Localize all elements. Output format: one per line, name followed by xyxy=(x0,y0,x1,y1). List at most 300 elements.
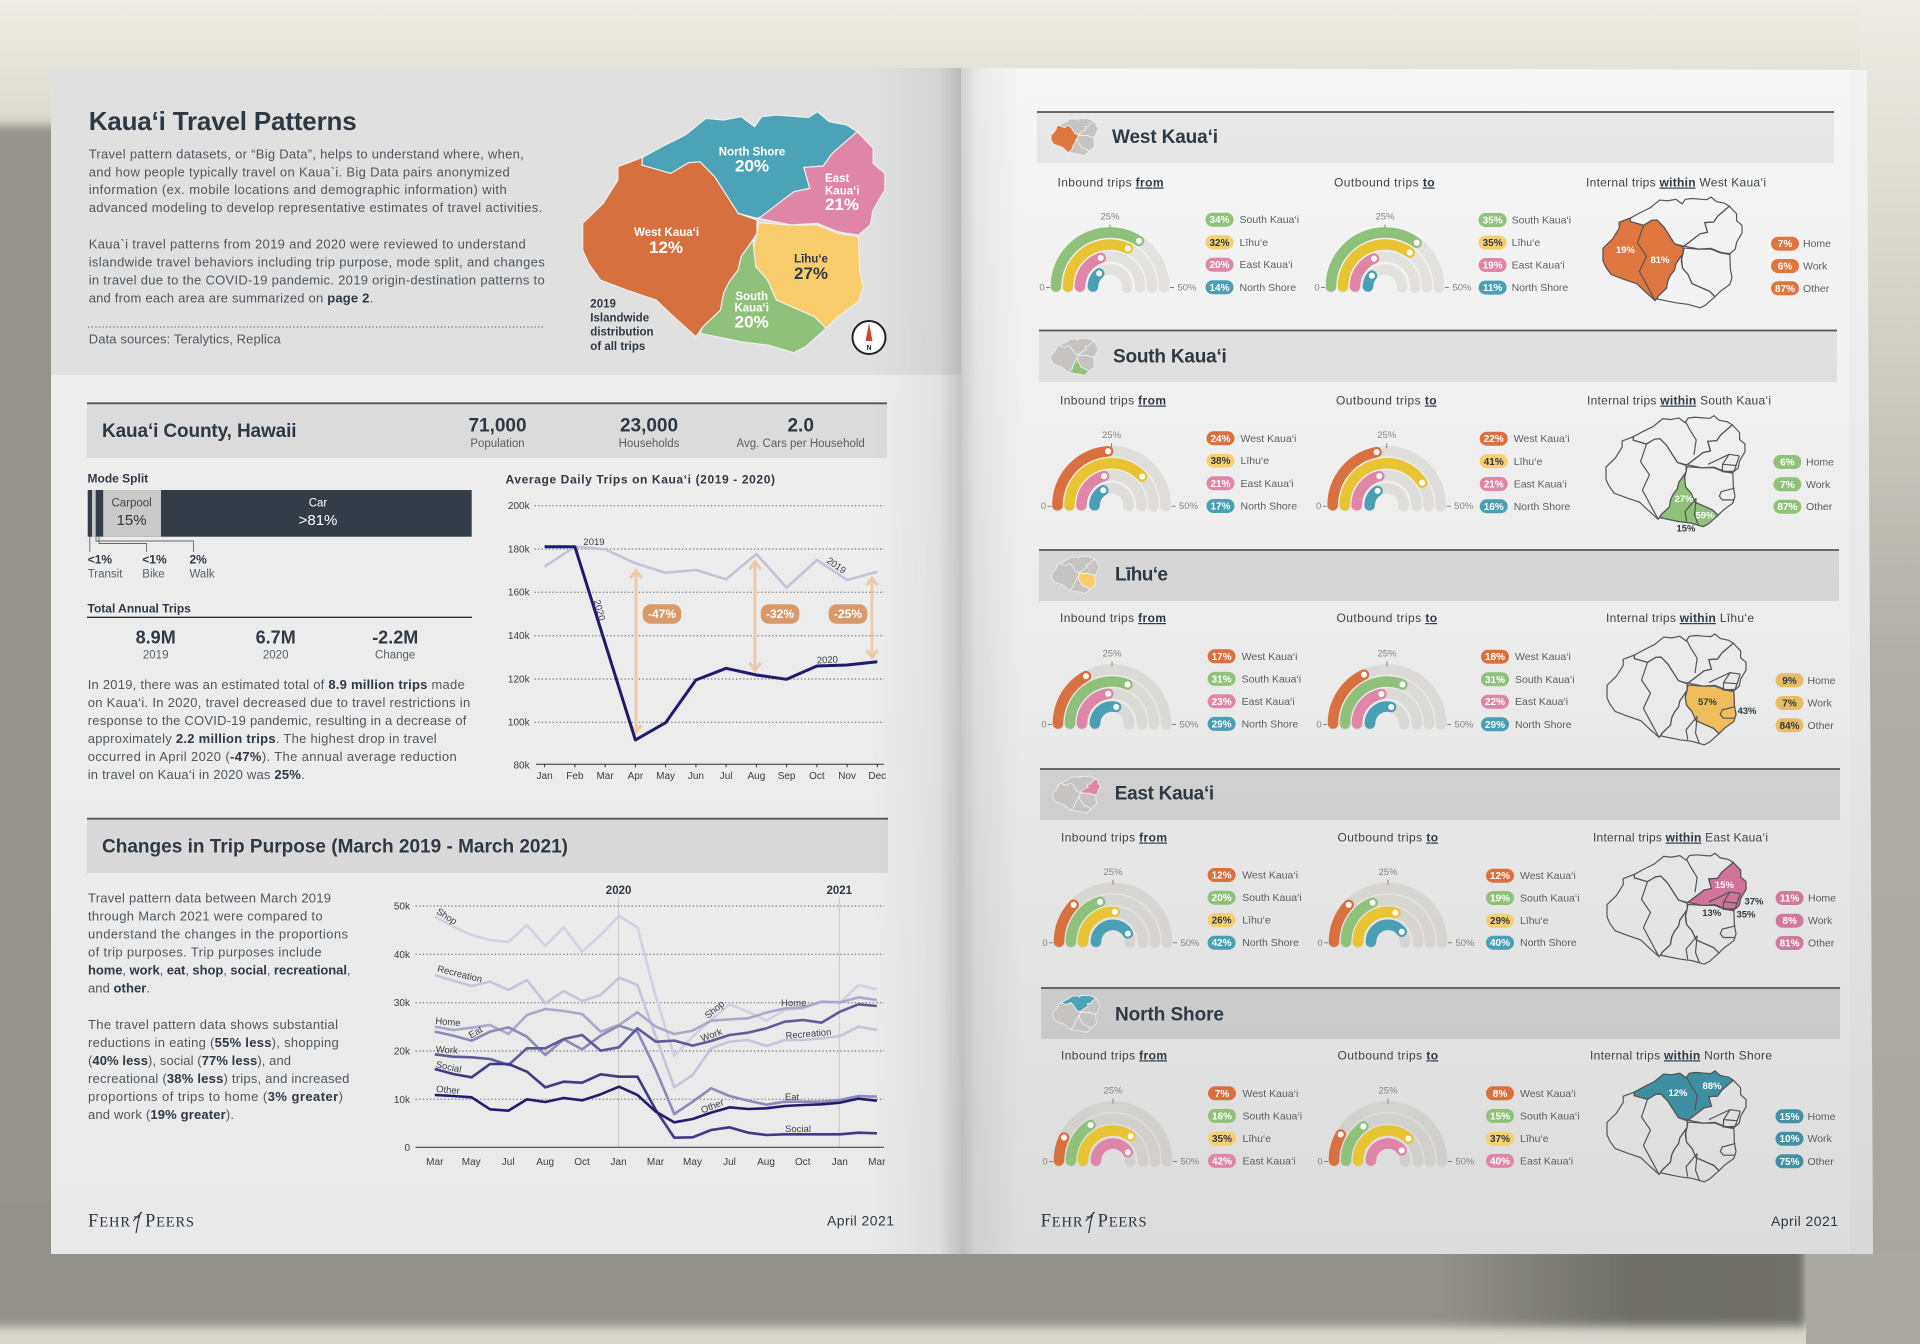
legend: East outbound: North Shore xyxy=(1520,937,1577,949)
legend: Līhu‘e inbound: East Kaua‘i xyxy=(1242,696,1295,708)
gauge: Līhu‘e inbound: 25% xyxy=(1102,648,1122,660)
legend: North outbound xyxy=(1486,1086,1580,1168)
chart: mode split bar: Car xyxy=(309,497,327,509)
gauge: West outbound: 25% xyxy=(1375,212,1395,222)
map: West internal trips: 81% xyxy=(1650,255,1670,266)
date: right footer: April 2021 xyxy=(1771,1213,1838,1229)
chart: average daily trips: Jun xyxy=(688,771,704,782)
chart: mode split bar xyxy=(88,471,472,580)
gauge: East outbound: 0 xyxy=(1317,938,1323,949)
chart: trip purpose lines xyxy=(394,885,886,1168)
intro text block: and from each area are summarized on page 2. xyxy=(89,290,373,305)
legend: South outbound: 41% xyxy=(1484,457,1504,468)
gauge: Līhu‘e outbound: 0 xyxy=(1316,720,1322,730)
legend: Līhu‘e internal: 84% xyxy=(1779,721,1800,732)
legend: East internal: Work xyxy=(1808,915,1833,927)
legend: South internal: Other xyxy=(1806,501,1833,513)
legend: East inbound: Līhu‘e xyxy=(1242,914,1271,926)
legend: Līhu‘e internal: 7% xyxy=(1782,698,1797,709)
gauge: North outbound: 25% xyxy=(1378,1086,1398,1096)
legend: North internal: Other xyxy=(1808,1156,1834,1168)
chart: mode split bar: 15% xyxy=(117,512,147,529)
chart: trip purpose lines: Eat xyxy=(467,1024,485,1041)
chart: average daily trips: 100k xyxy=(508,718,531,729)
legend: South outbound: 16% xyxy=(1484,502,1504,513)
panel: county header: Kaua‘i County, Hawaii xyxy=(102,421,296,442)
legend: Līhu‘e inbound: North Shore xyxy=(1242,718,1298,730)
legend: South internal: Work xyxy=(1806,479,1831,491)
legend: North outbound: West Kaua‘i xyxy=(1520,1088,1576,1100)
panel: introduction band xyxy=(51,68,961,375)
data sources note: Data sources: Teralytics, Replica xyxy=(89,332,281,347)
legend: Līhu‘e inbound: West Kaua‘i xyxy=(1242,651,1297,663)
chart: trip purpose lines: Jan xyxy=(832,1157,848,1168)
gauge: East outbound: 25% xyxy=(1378,867,1398,878)
section: East Kaua‘i: East Kaua‘i xyxy=(1115,783,1214,804)
gauge: North inbound: 25% xyxy=(1103,1086,1123,1096)
legend: South internal: 6% xyxy=(1780,458,1795,468)
panel: total annual trips: 2020 xyxy=(263,650,288,662)
legend: East internal: 8% xyxy=(1782,916,1797,927)
legend: East internal: Home xyxy=(1808,892,1836,904)
chart: average daily trips: 2020 xyxy=(817,654,838,667)
logo: right footer: PEERS xyxy=(1098,1212,1147,1232)
gauge: East inbound xyxy=(1042,867,1200,996)
legend: South internal: Home xyxy=(1806,456,1834,468)
legend: North outbound: 8% xyxy=(1493,1089,1507,1100)
legend: South inbound: 38% xyxy=(1210,456,1231,467)
chart: trip purpose lines: Home xyxy=(781,998,806,1009)
legend: Līhu‘e outbound: 31% xyxy=(1485,675,1505,686)
map: West internal trips: 19% xyxy=(1616,245,1636,256)
chart: trip purpose lines: 2021 xyxy=(827,885,853,897)
intro text block: in travel due to the COVID-19 pandemic. 2019 origin-destination patterns to xyxy=(89,273,545,288)
legend: West inbound: 32% xyxy=(1209,238,1230,249)
legend: South outbound: 22% xyxy=(1484,434,1504,445)
gauge: North inbound xyxy=(1042,1086,1200,1214)
section: North Shore: Internal trips within North Shore xyxy=(1590,1048,1772,1062)
gauge: Līhu‘e outbound: 25% xyxy=(1377,648,1397,660)
title: Kaua‘i Travel Patterns xyxy=(89,106,357,136)
icon: north compass xyxy=(852,321,886,354)
chart: average daily trips: May xyxy=(656,771,675,782)
gauge: Līhu‘e outbound: 50% xyxy=(1454,720,1474,730)
gauge: South inbound: 0 xyxy=(1041,501,1046,512)
legend: Līhu‘e inbound: 31% xyxy=(1212,674,1232,685)
chart: average daily trips: 2019 xyxy=(583,537,605,548)
map: islandwide distribution: South xyxy=(735,291,768,303)
date: left footer: April 2021 xyxy=(827,1213,894,1229)
gauge: North inbound: 0 xyxy=(1042,1156,1048,1168)
legend: East outbound xyxy=(1486,869,1580,950)
gauge: South outbound: 50% xyxy=(1454,501,1474,512)
text block: trip purpose description: through March 2021 were compared to xyxy=(88,908,323,923)
legend: West inbound xyxy=(1206,213,1299,294)
legend: North inbound: South Kaua‘i xyxy=(1242,1110,1302,1122)
chart: average daily trips: Jul xyxy=(720,771,732,782)
legend: South outbound: North Shore xyxy=(1514,501,1570,513)
chart: trip purpose lines: Jan xyxy=(611,1157,627,1168)
section: East Kaua‘i: Inbound trips from xyxy=(1061,830,1167,844)
legend: South inbound xyxy=(1206,431,1297,513)
chart: trip purpose lines: Oct xyxy=(574,1157,590,1168)
chart: trip purpose lines: Other xyxy=(436,1084,460,1097)
legend: South outbound: East Kaua‘i xyxy=(1514,479,1567,491)
legend: North outbound: East Kaua‘i xyxy=(1520,1155,1573,1167)
chart: average daily trips: 2019 xyxy=(824,555,848,577)
text block: trip purpose description: understand the changes in the proportions xyxy=(88,926,348,941)
map: South internal trips xyxy=(1606,416,1745,534)
legend: Līhu‘e inbound: 23% xyxy=(1212,697,1232,708)
panel: trip purpose header: Changes in Trip Purpose (March 2019 - March 2021) xyxy=(102,837,568,858)
section: Līhu‘e: Internal trips within Līhu‘e xyxy=(1606,611,1754,625)
map caption: of all trips xyxy=(590,341,645,353)
section: North Shore xyxy=(1041,988,1840,1214)
legend: Līhu‘e inbound: 29% xyxy=(1212,719,1232,730)
panel: county header xyxy=(87,403,887,458)
legend: South outbound: Līhu‘e xyxy=(1514,456,1542,468)
map: islandwide distribution: 21% xyxy=(825,195,859,214)
map: East internal trips: 35% xyxy=(1736,910,1756,920)
icon: Līhu‘e locator map xyxy=(1052,556,1099,593)
legend: North internal: 75% xyxy=(1779,1157,1800,1168)
legend: South internal: 7% xyxy=(1780,480,1795,491)
intro text block: information (ex. mobile locations and demographic information) with xyxy=(89,182,507,197)
section: East Kaua‘i: Outbound trips to xyxy=(1338,830,1438,844)
legend: West inbound: South Kaua‘i xyxy=(1240,214,1299,226)
chart: average daily trips: 160k xyxy=(508,588,531,599)
map: South internal trips: 27% xyxy=(1674,494,1694,505)
legend: South outbound: West Kaua‘i xyxy=(1514,433,1570,445)
text block: trip purpose description: reductions in eating (55% less), shopping xyxy=(88,1035,339,1050)
legend: East outbound: 29% xyxy=(1490,916,1510,927)
legend: West inbound: Līhu‘e xyxy=(1240,237,1268,249)
legend: East internal: 81% xyxy=(1780,938,1800,950)
chart: trip purpose lines: Work xyxy=(699,1027,724,1045)
map: West internal trips xyxy=(1603,197,1742,308)
legend: Līhu‘e inbound: South Kaua‘i xyxy=(1242,673,1301,685)
text block: trip purpose description: recreational (38% less) trips, and increased xyxy=(88,1071,349,1086)
gauge: East inbound: 50% xyxy=(1180,938,1200,949)
legend: East inbound xyxy=(1208,868,1302,950)
section: South Kaua‘i xyxy=(1039,330,1837,559)
legend: South inbound: North Shore xyxy=(1240,500,1297,512)
legend: East outbound: South Kaua‘i xyxy=(1520,893,1580,905)
legend: North outbound: 37% xyxy=(1490,1134,1510,1145)
legend: South inbound: East Kaua‘i xyxy=(1240,478,1294,490)
map: islandwide distribution: Kaua‘i xyxy=(825,185,860,197)
section: Līhu‘e xyxy=(1039,550,1839,778)
chart: average daily trips xyxy=(506,472,886,782)
text block: trip purpose description: home, work, eat, shop, social, recreational, xyxy=(88,962,350,977)
chart: average daily trips: 200k xyxy=(508,501,531,512)
map: islandwide distribution: West Kaua‘i xyxy=(634,227,699,239)
legend: East inbound: South Kaua‘i xyxy=(1242,892,1302,904)
gauge: North outbound xyxy=(1317,1086,1475,1214)
chart: average daily trips: 140k xyxy=(508,631,531,642)
chart: average daily trips: Apr xyxy=(628,771,644,782)
legend: Līhu‘e internal: Home xyxy=(1808,675,1836,687)
section: North Shore: Inbound trips from xyxy=(1061,1048,1167,1062)
chart: average daily trips: 80k xyxy=(513,760,531,771)
legend: East outbound: 40% xyxy=(1490,938,1510,949)
panel: county header: Population xyxy=(470,438,525,450)
map caption: 2019 xyxy=(590,298,616,310)
legend: North outbound: 40% xyxy=(1490,1156,1510,1167)
gauge: South inbound xyxy=(1041,430,1199,559)
legend: North inbound: 7% xyxy=(1215,1089,1229,1100)
map: islandwide distribution: 27% xyxy=(794,264,828,283)
legend: East internal: Other xyxy=(1808,938,1835,950)
chart: trip purpose lines: 40k xyxy=(394,950,411,961)
chart: average daily trips: Sep xyxy=(778,771,796,782)
chart: trip purpose lines: 30k xyxy=(394,998,411,1009)
legend: North inbound: Līhu‘e xyxy=(1242,1133,1271,1145)
chart: mode split bar: Mode Split xyxy=(88,471,148,485)
legend: Līhu‘e outbound: 29% xyxy=(1485,720,1505,731)
chart: average daily trips: -47% xyxy=(648,607,676,621)
panel: total annual trips: Change xyxy=(375,650,415,662)
text block: trip purpose description: (40% less), social (77% less), and xyxy=(88,1053,291,1068)
panel: county header: 23,000 xyxy=(620,416,678,437)
legend: Līhu‘e internal: Work xyxy=(1808,697,1833,709)
legend: North inbound xyxy=(1208,1086,1302,1168)
legend: Līhu‘e outbound xyxy=(1481,650,1575,731)
intro text block: Kaua`i travel patterns from 2019 and 2020 were reviewed to understand xyxy=(89,236,526,251)
gauge: South inbound: 25% xyxy=(1102,430,1122,441)
section: Līhu‘e: Līhu‘e xyxy=(1115,565,1168,586)
logo: right footer xyxy=(1041,1212,1147,1233)
chart: average daily trips: 2020 xyxy=(591,599,607,622)
legend: North inbound: 16% xyxy=(1212,1111,1232,1122)
map caption: distribution xyxy=(590,327,654,339)
legend: West outbound: 35% xyxy=(1483,238,1503,249)
map: North internal trips: 88% xyxy=(1702,1081,1722,1092)
chart: trip purpose lines: Eat xyxy=(785,1092,799,1103)
legend: North outbound: 15% xyxy=(1490,1111,1510,1122)
legend: West inbound: North Shore xyxy=(1240,282,1296,294)
map: Līhu‘e internal trips xyxy=(1607,634,1757,745)
map: islandwide distribution: East xyxy=(825,173,849,185)
chart: average daily trips: Average Daily Trips on Kaua‘i (2019 - 2020) xyxy=(506,472,775,486)
section: South Kaua‘i: Outbound trips to xyxy=(1336,394,1437,408)
gauge: West outbound: 50% xyxy=(1452,282,1472,294)
gauge: Līhu‘e inbound: 0 xyxy=(1041,720,1047,730)
left page xyxy=(51,68,961,1254)
chart: trip purpose lines: Shop xyxy=(703,999,727,1021)
legend: West internal: Work xyxy=(1803,260,1828,272)
chart: average daily trips: -25% xyxy=(834,607,862,621)
gauge: West inbound: 50% xyxy=(1177,282,1197,294)
legend: East inbound: 12% xyxy=(1212,870,1232,882)
section: West Kaua‘i xyxy=(1037,112,1834,340)
text block: annual trips summary: on Kaua‘i. In 2020, travel decreased due to travel restrictions in xyxy=(88,695,470,710)
intro text block: islandwide travel behaviors including trip purpose, mode split, and changes xyxy=(89,255,545,270)
gauge: South inbound: 50% xyxy=(1179,501,1199,512)
gauge: Līhu‘e inbound: 50% xyxy=(1179,720,1199,730)
map: islandwide distribution: 20% xyxy=(735,157,769,176)
legend: West outbound xyxy=(1479,213,1571,295)
map: islandwide distribution: 20% xyxy=(735,313,769,332)
section: West Kaua‘i: Outbound trips to xyxy=(1334,176,1435,190)
chart: trip purpose lines: Recreation xyxy=(436,964,483,985)
panel: total annual trips: 8.9M xyxy=(136,627,176,647)
legend: South internal xyxy=(1773,455,1834,514)
chart: trip purpose lines: Mar xyxy=(868,1157,886,1168)
legend: East inbound: 42% xyxy=(1212,938,1232,949)
panel: county header: Households xyxy=(619,438,680,450)
icon: north compass: N xyxy=(866,345,872,352)
logo: left footer: FEHR xyxy=(88,1212,130,1232)
legend: South inbound: 17% xyxy=(1210,501,1231,512)
chart: average daily trips: Jan xyxy=(537,771,553,782)
legend: North inbound: East Kaua‘i xyxy=(1242,1155,1296,1167)
gauge: East outbound: 50% xyxy=(1455,938,1475,949)
chart: average daily trips: Nov xyxy=(838,771,856,782)
legend: West internal xyxy=(1771,237,1831,295)
legend: West internal: Other xyxy=(1803,283,1830,295)
chart: trip purpose lines: Social xyxy=(785,1124,811,1135)
gauge: Līhu‘e inbound xyxy=(1041,648,1199,778)
text block: trip purpose description: and work (19% greater). xyxy=(88,1107,234,1122)
legend: South inbound: West Kaua‘i xyxy=(1240,433,1296,445)
map: North internal trips xyxy=(1607,1071,1746,1182)
chart: mode split bar: Transit xyxy=(88,568,123,580)
chart: trip purpose lines: 10k xyxy=(394,1095,411,1106)
legend: Līhu‘e outbound: 18% xyxy=(1485,652,1505,663)
right page xyxy=(961,68,1873,1254)
text block: annual trips summary: In 2019, there was an estimated total of 8.9 million trips made xyxy=(88,677,465,692)
map: islandwide distribution: Kaua‘i xyxy=(734,303,769,315)
legend: Līhu‘e outbound: South Kaua‘i xyxy=(1515,674,1575,686)
chart: mode split bar: Walk xyxy=(190,568,215,580)
gauge: West outbound xyxy=(1314,212,1472,340)
panel: county header: 2.0 xyxy=(787,416,814,437)
map: East internal trips xyxy=(1607,853,1764,964)
text block: trip purpose description: The travel pattern data shows substantial xyxy=(88,1017,338,1032)
legend: East internal: 11% xyxy=(1780,894,1799,904)
gauge: West inbound xyxy=(1039,212,1197,340)
legend: East inbound: West Kaua‘i xyxy=(1242,870,1298,882)
chart: trip purpose lines: Jul xyxy=(723,1157,736,1168)
text block: annual trips summary: occurred in April 2020 (-47%). The annual average reduction xyxy=(88,749,457,764)
legend: East outbound: 19% xyxy=(1490,894,1510,905)
section: West Kaua‘i: Inbound trips from xyxy=(1058,176,1164,190)
chart: average daily trips: Mar xyxy=(596,771,614,782)
legend: North outbound: Līhu‘e xyxy=(1520,1133,1549,1145)
icon: East locator map xyxy=(1053,776,1100,813)
legend: West inbound: 14% xyxy=(1209,283,1230,294)
gauge: East inbound: 0 xyxy=(1042,938,1048,949)
chart: trip purpose lines: Recreation xyxy=(785,1027,832,1042)
legend: North internal: 10% xyxy=(1779,1134,1800,1145)
chart: trip purpose lines: Work xyxy=(435,1044,458,1057)
chart: trip purpose lines: 0 xyxy=(404,1143,410,1154)
map: North internal trips: 12% xyxy=(1668,1088,1688,1099)
legend: North internal: Work xyxy=(1808,1133,1833,1145)
legend: West outbound: Līhu‘e xyxy=(1512,237,1540,249)
legend: West internal: 87% xyxy=(1775,284,1795,295)
logo: left footer: PEERS xyxy=(145,1212,194,1232)
gauge: East outbound xyxy=(1317,867,1475,996)
legend: Līhu‘e internal xyxy=(1776,673,1836,732)
legend: East outbound: 12% xyxy=(1490,871,1510,882)
chart: trip purpose lines: Home xyxy=(435,1016,461,1029)
chart: trip purpose lines: Shop xyxy=(434,906,459,928)
text block: annual trips summary: approximately 2.2 million trips. The highest drop in travel xyxy=(88,731,437,746)
chart: trip purpose lines: Other xyxy=(699,1097,726,1116)
map: Līhu‘e internal trips: 57% xyxy=(1698,697,1718,708)
chart: trip purpose lines: Aug xyxy=(757,1157,775,1168)
map: islandwide distribution: 12% xyxy=(649,238,683,257)
chart: average daily trips: Aug xyxy=(748,771,765,782)
map: East internal trips: 15% xyxy=(1715,880,1734,891)
legend: East outbound: West Kaua‘i xyxy=(1520,870,1576,882)
legend: Līhu‘e outbound: West Kaua‘i xyxy=(1515,651,1571,663)
chart: trip purpose lines: Mar xyxy=(426,1157,444,1168)
legend: Līhu‘e internal: Other xyxy=(1808,720,1834,732)
legend: West outbound: 35% xyxy=(1483,216,1503,226)
chart: trip purpose lines: 50k xyxy=(394,902,411,912)
gauge: South outbound: 0 xyxy=(1316,501,1321,512)
map: islandwide distribution: Līhu‘e xyxy=(794,254,828,266)
chart: trip purpose lines: Mar xyxy=(647,1157,665,1168)
gauge: East inbound: 25% xyxy=(1103,867,1123,878)
map: islandwide distribution: North Shore xyxy=(719,147,785,159)
map caption: Islandwide xyxy=(590,313,649,325)
panel: trip purpose header xyxy=(87,819,888,873)
legend: Līhu‘e outbound: East Kaua‘i xyxy=(1515,696,1568,708)
legend: South internal: 87% xyxy=(1777,502,1798,513)
legend: West inbound: 20% xyxy=(1209,260,1230,271)
legend: North internal: Home xyxy=(1808,1111,1836,1123)
text block: trip purpose description: of trip purposes. Trip purposes include xyxy=(88,944,322,959)
gauge: West inbound: 0 xyxy=(1039,282,1045,294)
map: South internal trips: 15% xyxy=(1676,524,1696,534)
map caption xyxy=(590,298,654,353)
map: East internal trips: 37% xyxy=(1744,896,1764,908)
legend: North inbound: 42% xyxy=(1212,1156,1232,1167)
map: islandwide distribution xyxy=(583,112,885,353)
legend: Līhu‘e internal: 9% xyxy=(1782,676,1797,687)
legend: South inbound: Līhu‘e xyxy=(1240,455,1269,467)
intro text block xyxy=(89,146,545,305)
legend: West internal: Home xyxy=(1803,238,1831,250)
chart: average daily trips: -32% xyxy=(766,607,794,621)
gauge: West inbound: 25% xyxy=(1100,212,1120,222)
section: East Kaua‘i xyxy=(1040,769,1840,996)
section: Līhu‘e: Outbound trips to xyxy=(1336,611,1437,625)
section: South Kaua‘i: Inbound trips from xyxy=(1060,394,1166,408)
legend: North outbound: South Kaua‘i xyxy=(1520,1110,1580,1122)
section: North Shore: North Shore xyxy=(1115,1004,1224,1025)
icon: South locator map xyxy=(1051,338,1098,375)
gauge: Līhu‘e outbound xyxy=(1316,648,1474,778)
chart: mode split bar: <1% xyxy=(88,552,112,566)
chart: trip purpose lines: Oct xyxy=(795,1157,811,1168)
chart: trip purpose lines: 2020 xyxy=(606,885,631,897)
panel: total annual trips: -2.2M xyxy=(372,627,418,647)
legend: North internal: 15% xyxy=(1779,1112,1800,1123)
panel: total annual trips: Total Annual Trips xyxy=(88,602,191,616)
legend: South inbound: 21% xyxy=(1210,479,1231,490)
legend: West internal: 6% xyxy=(1778,261,1792,272)
legend: West outbound: South Kaua‘i xyxy=(1512,214,1571,226)
intro text block: and how people typically travel on Kaua`i. Big Data pairs anonymized xyxy=(89,164,510,180)
legend: East outbound: Līhu‘e xyxy=(1520,915,1549,927)
intro text block: Travel pattern datasets, or “Big Data”, helps to understand where, when, xyxy=(89,146,524,161)
logo: left footer xyxy=(88,1212,194,1233)
